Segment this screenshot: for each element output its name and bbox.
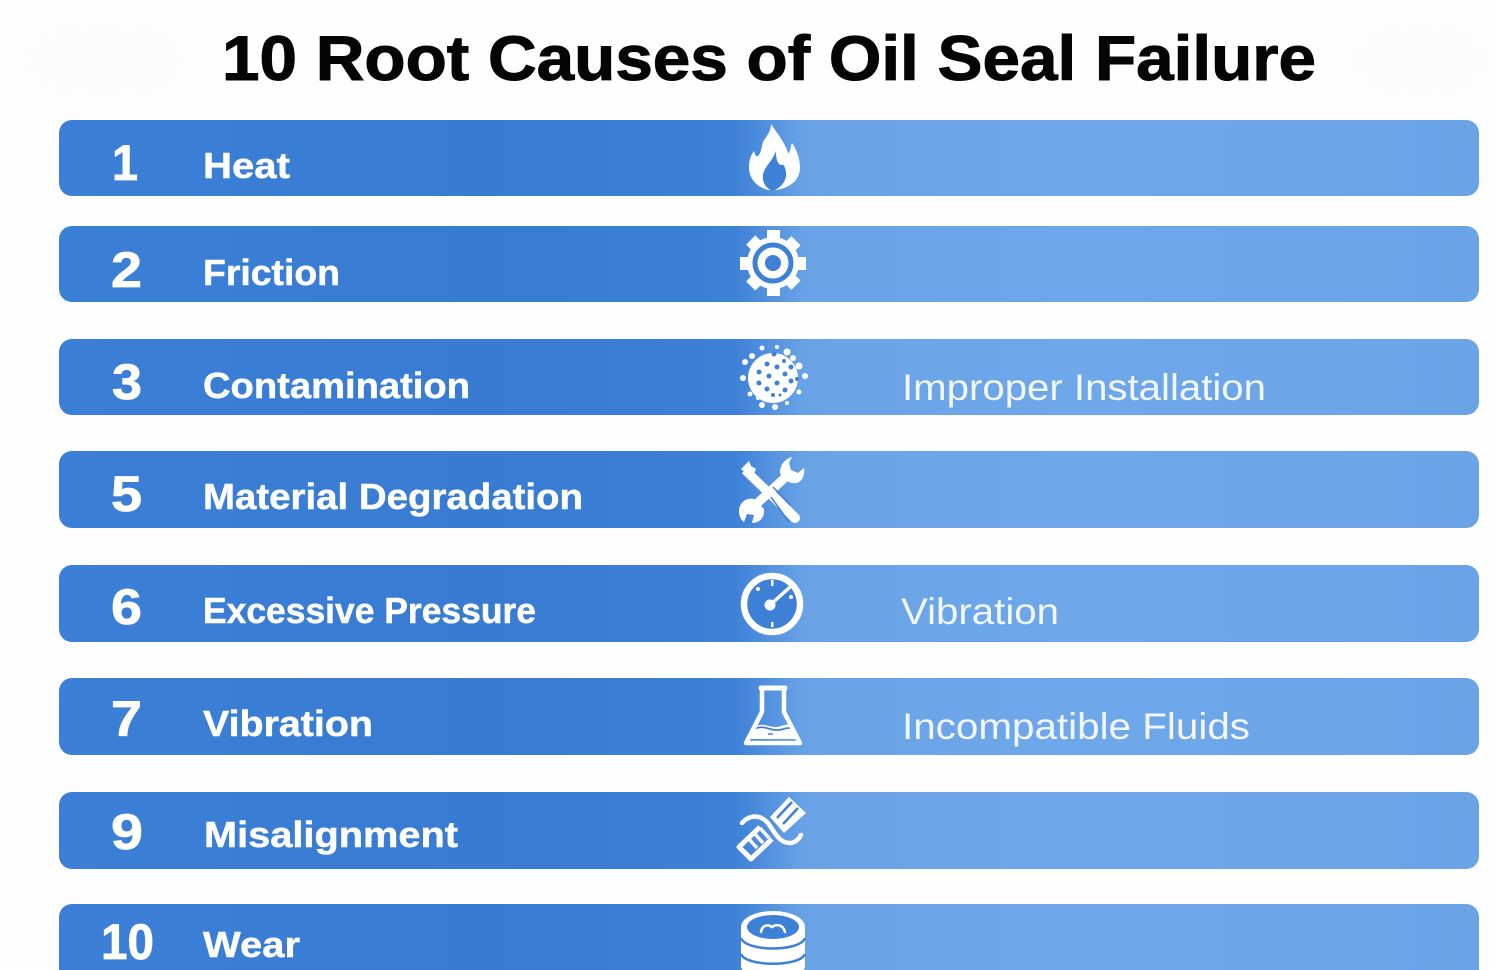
row 8: Wear [59,904,1479,970]
number 9: 9 [111,804,143,860]
row 5: Excessive Pressure [59,565,1479,642]
row 2: Friction [59,226,1479,302]
label Heat: Heat [203,145,290,186]
label Friction: Friction [203,252,340,293]
label Material Degradation: Material Degradation [203,476,583,517]
number 10: 10 [101,914,154,970]
label Misalignment: Misalignment [204,814,458,855]
right label Improper Installation: Improper Installation [902,367,1266,408]
label Contamination: Contamination [203,365,470,406]
icon: flask [746,688,800,743]
number 1: 1 [112,135,138,191]
number 6: 6 [111,579,142,635]
number 3: 3 [112,354,142,410]
right label Incompatible Fluids: Incompatible Fluids [902,706,1250,747]
label Excessive Pressure: Excessive Pressure [203,590,536,631]
title: 10 Root Causes of Oil Seal Failure [222,24,1316,94]
icon: seal stack [741,911,805,970]
icon: misaligned shafts [739,797,806,859]
row 6: Vibration [59,678,1479,755]
icon: flame [749,124,800,190]
row 7: Misalignment [59,792,1479,869]
right label Vibration: Vibration [901,591,1059,632]
icon: pressure gauge [744,576,800,632]
number 7: 7 [111,691,142,747]
icon: crossed tools [739,457,804,523]
row 4: Material Degradation [59,451,1479,528]
number 2: 2 [111,242,142,298]
row 1: Heat [59,120,1479,196]
icon: particles [740,345,808,410]
number 5: 5 [111,466,142,522]
label Wear: Wear [203,924,300,965]
label Vibration: Vibration [203,703,373,744]
icon: gear [740,230,806,296]
row 3: Contamination [59,339,1479,415]
